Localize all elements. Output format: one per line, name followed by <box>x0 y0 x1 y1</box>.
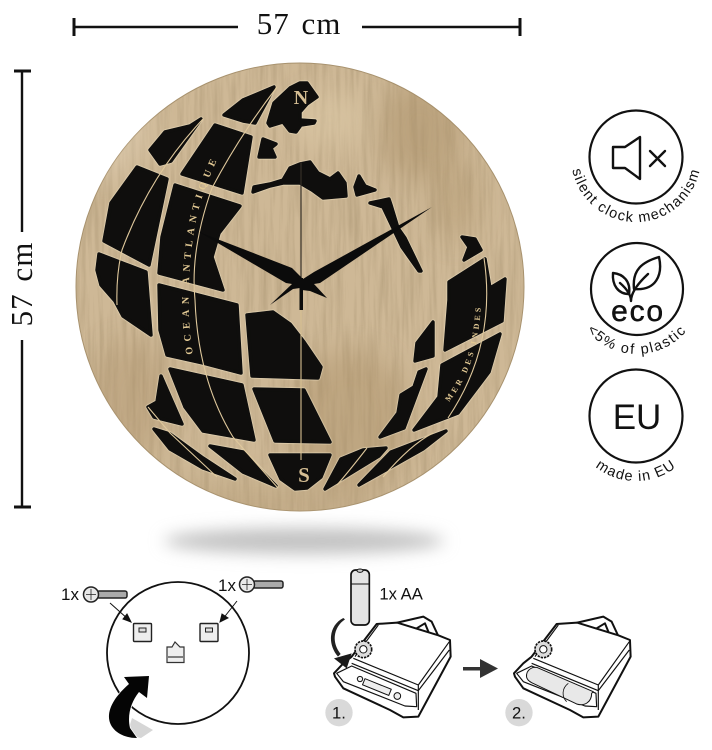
caption: silent clock mechanism <box>572 169 700 222</box>
left screw <box>84 587 127 602</box>
caption: made in EU <box>596 460 674 481</box>
clock wood disc <box>50 60 524 527</box>
cross-shaped land <box>370 199 421 271</box>
right arrow <box>220 601 237 622</box>
left screw label: 1x <box>61 585 79 604</box>
icon badge: eco <box>590 242 685 357</box>
left dimension: 57 cm: 57 cm <box>4 242 39 326</box>
meridian line across wood <box>300 162 302 310</box>
islet <box>355 176 375 195</box>
left arrow <box>110 603 131 622</box>
south east panel two <box>359 431 446 485</box>
icon badge: silent mechanism <box>572 109 700 222</box>
small south west panel <box>148 376 182 424</box>
arrow between steps <box>463 659 498 678</box>
right hanger <box>200 624 218 642</box>
icon badge: EU <box>588 368 684 481</box>
upper centre panel <box>182 125 251 193</box>
letter S: S <box>298 463 310 487</box>
step badge two: 2. <box>512 704 526 723</box>
mid strip island <box>380 369 426 437</box>
clock back outline <box>107 582 249 724</box>
curved insertion arrow <box>331 618 352 668</box>
south east panel one <box>325 448 386 489</box>
east panel upper <box>445 259 505 350</box>
wooden clock <box>76 62 524 512</box>
step badge one: 1. <box>332 704 346 723</box>
top dimension: 57 cm <box>74 6 520 41</box>
central continent <box>247 312 321 378</box>
east island <box>462 237 481 260</box>
mechanism body <box>334 617 451 717</box>
icon: muted speaker <box>613 137 665 179</box>
icon: leaves <box>613 257 660 301</box>
hour hand <box>302 207 432 298</box>
EU wordmark: EU <box>613 398 661 437</box>
eco wordmark: eco <box>611 295 665 328</box>
north-west top panel <box>150 119 201 164</box>
right screw label: 1x <box>218 576 236 595</box>
north cap panel <box>268 83 317 132</box>
central lower panel <box>254 389 330 442</box>
south west panel <box>170 369 254 440</box>
north-west panel <box>104 167 167 265</box>
step badge one <box>325 699 353 726</box>
mounting diagram <box>61 576 283 738</box>
west lower panel <box>97 254 151 335</box>
battery <box>351 569 369 625</box>
battery step one <box>325 569 451 726</box>
left hanger <box>134 624 152 642</box>
gold meridian lines <box>117 87 487 488</box>
atlantic panel <box>159 185 240 290</box>
battery label: 1x AA <box>379 584 424 603</box>
curved turn arrow <box>109 676 149 738</box>
top dimension: 57 cm: 57 cm <box>257 6 341 41</box>
panel top <box>224 87 274 123</box>
northern continent <box>253 162 346 198</box>
lone island <box>415 322 433 361</box>
centre pin <box>300 278 303 310</box>
small island <box>259 139 276 157</box>
caption: <5% of plastic <box>590 327 685 357</box>
letter N: N <box>294 87 309 109</box>
south west strip two <box>210 446 276 486</box>
east panel lower <box>414 334 500 430</box>
mechanism with battery <box>514 617 631 717</box>
clock mechanism <box>167 642 184 662</box>
minute hand <box>199 232 303 305</box>
label: mer des indes: MER DES INDES <box>444 308 481 402</box>
south west strip one <box>154 429 235 479</box>
left dimension: 57 cm <box>4 71 39 507</box>
battery step two <box>505 617 631 726</box>
south cap panel <box>270 455 330 489</box>
map cut-outs <box>97 83 505 489</box>
clock hands <box>199 207 432 310</box>
floor shadow <box>164 528 444 554</box>
label: ocean atlantique: OCEAN ANTLANTIQUE <box>182 159 216 354</box>
right screw <box>240 577 283 592</box>
ocean lower panel <box>159 285 241 373</box>
gray arrow tail <box>127 718 153 738</box>
